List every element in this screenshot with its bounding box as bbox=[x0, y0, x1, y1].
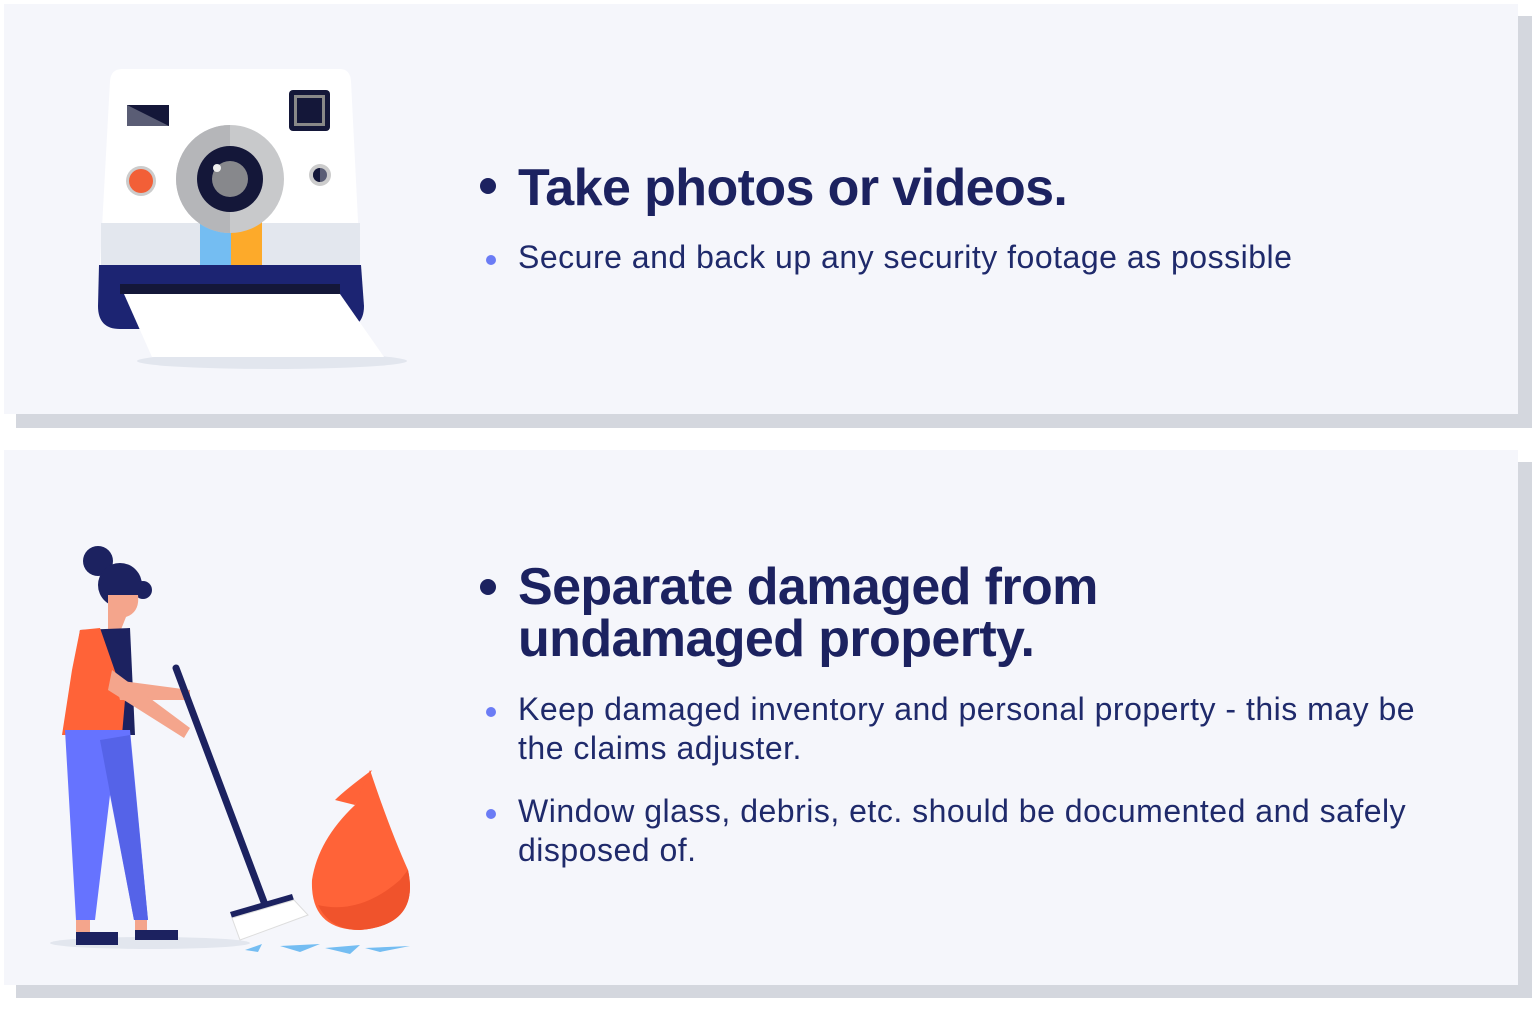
bullet text: window glass: Window glass, debris, etc. should be documented and safely bbox=[518, 793, 1406, 829]
bullet text: keep damaged inventory: the claims adjuster. bbox=[518, 730, 802, 766]
panel: separate property bbox=[4, 450, 1518, 985]
bullet text: window glass: disposed of. bbox=[518, 832, 697, 868]
bullet text: keep damaged inventory bbox=[486, 691, 1415, 766]
icon: woman sweeping bbox=[50, 546, 410, 954]
bullet text: keep damaged inventory: Keep damaged inventory and personal property - this may be bbox=[518, 691, 1415, 727]
heading: separate property bbox=[480, 558, 1098, 668]
heading: separate property: undamaged property. bbox=[518, 610, 1034, 668]
heading: separate property: Separate damaged from bbox=[518, 558, 1098, 616]
bullet text: security footage: Secure and back up any security footage as possible bbox=[518, 239, 1292, 275]
panel: take photos bbox=[4, 4, 1518, 414]
bullet text: window glass bbox=[486, 793, 1406, 868]
icon: instant camera bbox=[98, 69, 407, 369]
heading: take photos: Take photos or videos. bbox=[518, 159, 1067, 217]
